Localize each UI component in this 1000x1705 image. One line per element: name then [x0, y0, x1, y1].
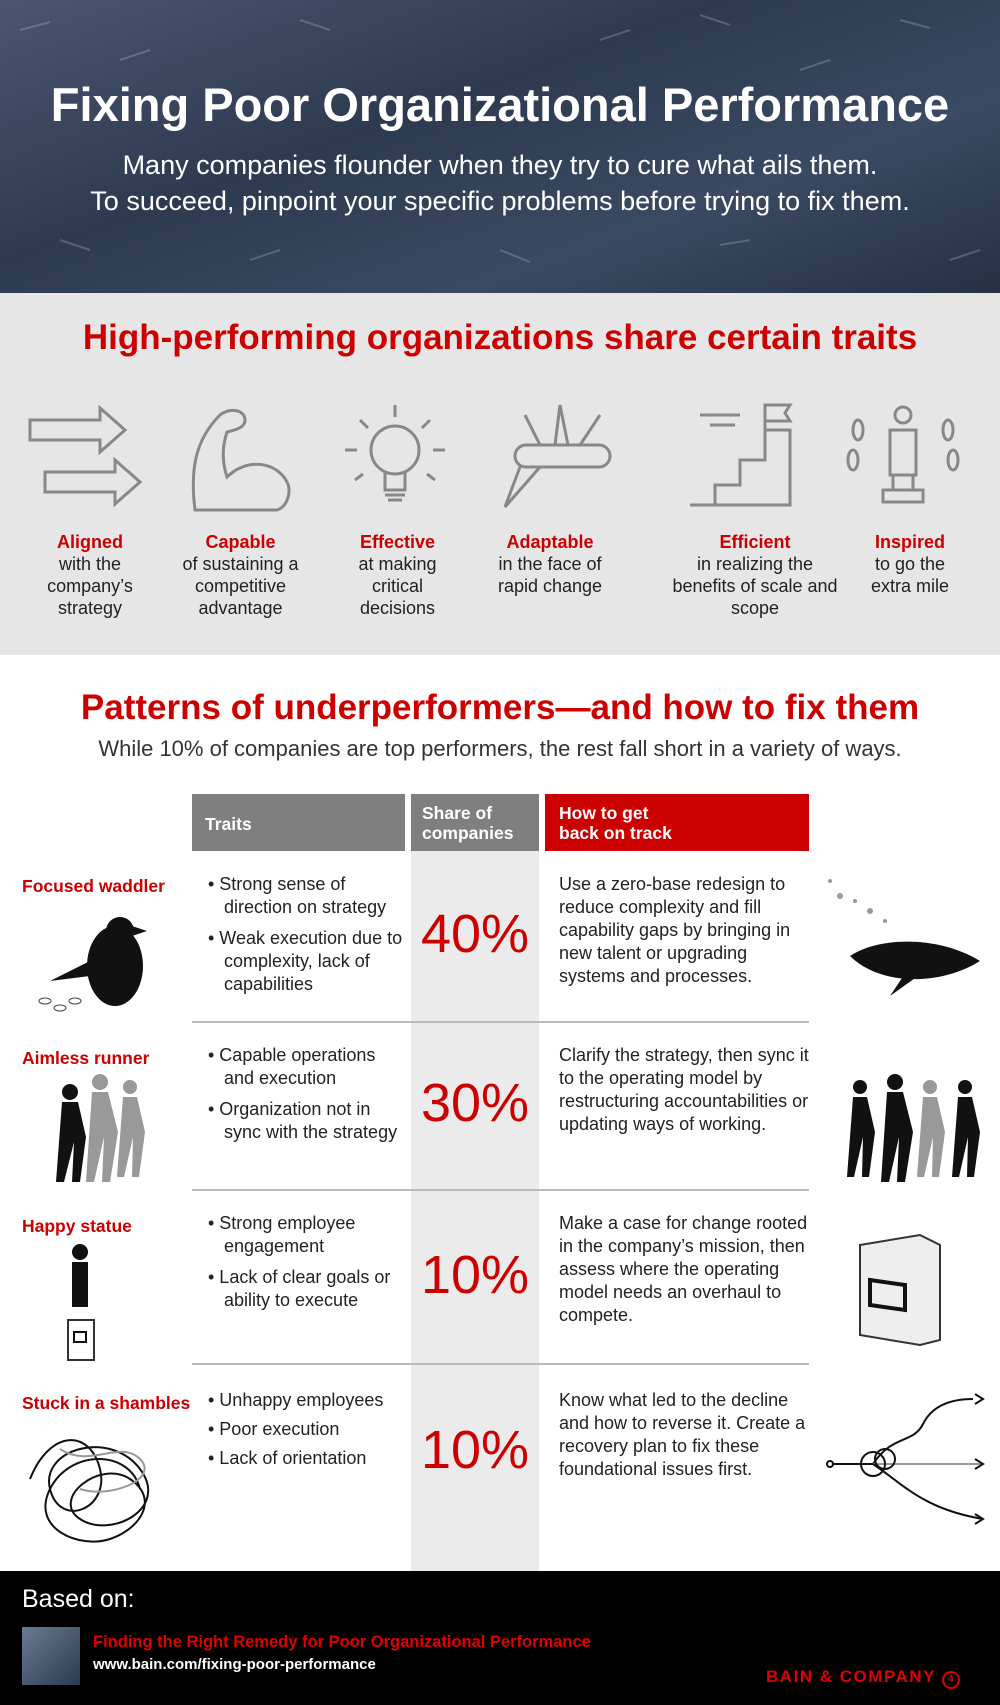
trait labels: Aligned: [57, 532, 123, 552]
footer: source: www.bain.com/fixing-poor-performance: [93, 1656, 376, 1673]
row: focused waddler: • Weak execution due to complexity, lack of capabilities: [208, 928, 402, 994]
text: Adaptable: [506, 532, 594, 552]
icon: statue: [846, 406, 960, 504]
footer: source: [93, 1633, 591, 1673]
row: aimless runner: 30%: [421, 1073, 529, 1133]
heading: patterns: Patterns of underperformers—and how to fix them: [81, 688, 919, 727]
subtitle: To succeed, pinpoint your specific problems before trying to fix them.: [90, 186, 910, 216]
row: aimless runner: Aimless runner: [22, 1048, 149, 1068]
row: happy statue: • Lack of clear goals or ability to execute: [208, 1267, 390, 1310]
row: aimless runner: • Organization not in sync with the strategy: [208, 1099, 397, 1142]
row: stuck in a shambles: [22, 1390, 985, 1543]
table header: [192, 794, 809, 851]
table header: Share of companies: [422, 803, 513, 843]
header banner: [0, 0, 1000, 293]
icon: arrows: [28, 404, 142, 508]
footer: [0, 1571, 1000, 1705]
row: happy statue: 10%: [421, 1245, 529, 1305]
text: Inspired: [875, 532, 945, 552]
row: focused waddler: • Strong sense of direction on strategy: [208, 874, 386, 917]
footer: source: Finding the Right Remedy for Poor Organizational Performance: [93, 1633, 591, 1651]
footer: logo: BAIN & COMPANY: [766, 1667, 936, 1686]
text: in realizing the benefits of scale and scope: [672, 554, 838, 618]
subtitle: patterns: While 10% of companies are top performers, the rest fall short in a variety of ways.: [98, 736, 902, 761]
row: stuck in a shambles: Stuck in a shambles: [22, 1393, 190, 1413]
text: of sustaining a competitive advantage: [182, 554, 299, 618]
footer: logo: 4: [948, 1674, 954, 1685]
row: stuck in a shambles: • Poor execution: [208, 1419, 339, 1439]
row: stuck in a shambles: • Unhappy employees: [208, 1390, 383, 1410]
subtitle: [90, 150, 910, 216]
footer: based on: Based on:: [22, 1585, 135, 1613]
row: stuck in a shambles: • Lack of orientation: [208, 1448, 366, 1468]
row: happy statue: Make a case for change rooted in the company’s mission, then assess where the operating model needs an overhaul to compete.: [559, 1213, 807, 1325]
text: Efficient: [719, 532, 790, 552]
text: to go the extra mile: [871, 554, 949, 596]
row: focused waddler: Use a zero-base redesign to reduce complexity and fill capability gaps by bringing in new talent or upgrading systems and processes.: [559, 874, 790, 986]
trait labels: with the company’s strategy: [47, 554, 133, 618]
row: happy statue: [22, 1213, 941, 1361]
row: happy statue: • Strong employee engagement: [208, 1213, 355, 1256]
icon: bulb: [345, 405, 445, 502]
row: stuck in a shambles: Know what led to the decline and how to reverse it. Create a recovery plan to fix these foundational issues first.: [559, 1390, 805, 1479]
footer: thumbnail: [22, 1627, 80, 1685]
row: aimless runner: Clarify the strategy, then sync it to the operating model by restructuring accountabilities or updating ways of working.: [559, 1045, 809, 1134]
icon: knife: [504, 404, 612, 508]
row: aimless runner: [22, 1045, 980, 1182]
text: Capable: [205, 532, 276, 552]
row: aimless runner: • Capable operations and execution: [208, 1045, 375, 1088]
text: at making critical decisions: [358, 554, 437, 618]
row: focused waddler: [22, 874, 980, 1012]
row: stuck in a shambles: 10%: [421, 1420, 529, 1480]
heading: traits: High-performing organizations share certain traits: [83, 318, 917, 357]
icon: arm: [192, 408, 291, 512]
panel: traits: [0, 293, 1000, 655]
row: focused waddler: Focused waddler: [22, 876, 165, 896]
subtitle: Many companies flounder when they try to cure what ails them.: [123, 150, 877, 180]
table header: How to get: [559, 803, 648, 823]
row: happy statue: Happy statue: [22, 1216, 132, 1236]
share column background: [411, 851, 539, 1571]
title: Fixing Poor Organizational Performance: [51, 78, 949, 131]
icon: stairs flag: [690, 404, 793, 506]
text: in the face of rapid change: [498, 554, 602, 596]
text: Effective: [360, 532, 435, 552]
table header: back on track: [559, 823, 672, 843]
table header: Traits: [205, 814, 252, 834]
row: focused waddler: 40%: [421, 904, 529, 964]
